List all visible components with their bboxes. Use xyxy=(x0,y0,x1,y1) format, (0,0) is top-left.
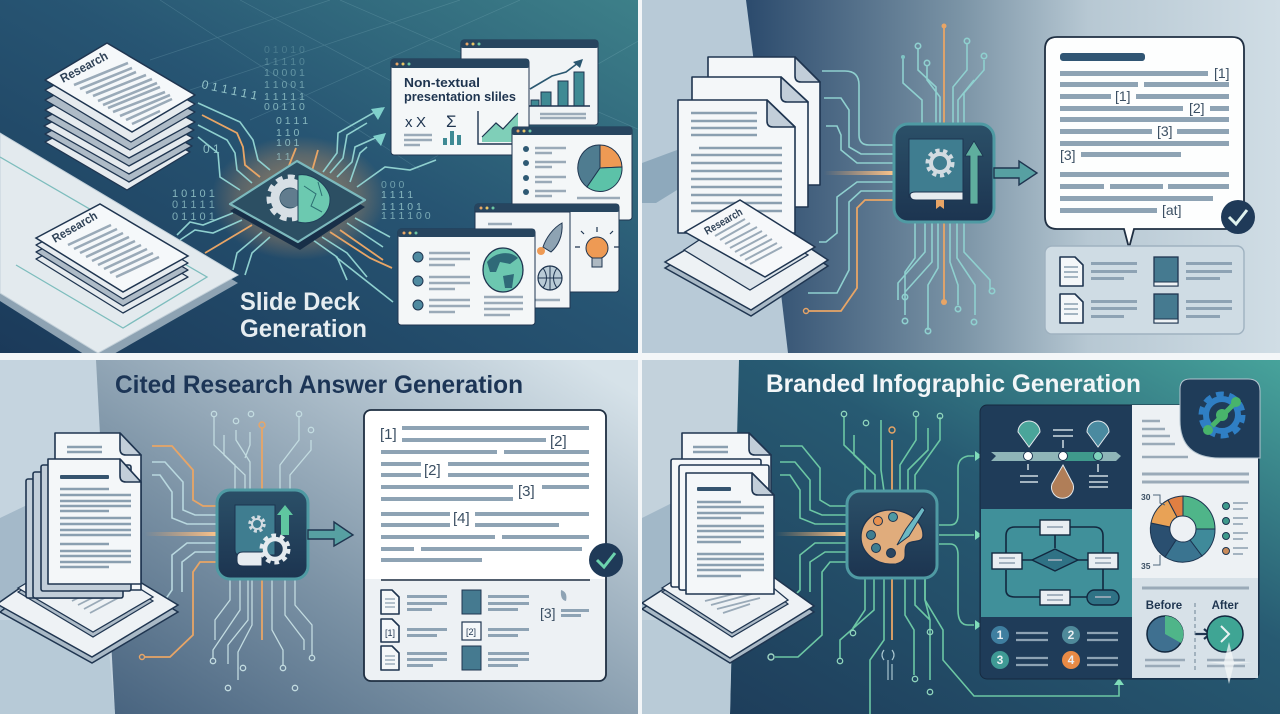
slide: non-textual presentation: Σ xyxy=(446,112,457,131)
answer card with references: [2] xyxy=(550,433,567,450)
arrow to answer xyxy=(994,161,1037,185)
document stack xyxy=(678,57,820,233)
check badge xyxy=(1221,200,1255,234)
timeline xyxy=(991,421,1121,498)
slide: non-textual presentation: x xyxy=(405,114,413,131)
numbered list: 4 xyxy=(1068,653,1075,667)
title: slide deck generation: Slide Deck xyxy=(240,288,360,316)
answer card with references: [1] xyxy=(385,628,395,638)
panel: cited answer with research document xyxy=(642,0,1280,353)
answer card: [3] xyxy=(1060,147,1076,163)
binary digit streams: 0 1 1 1 xyxy=(276,115,308,127)
paper stack lower xyxy=(36,204,188,313)
donut chart: 35 xyxy=(1141,561,1151,571)
binary digit streams: 1 1 xyxy=(276,151,291,163)
panel 1 background xyxy=(0,0,638,353)
panel 3 background xyxy=(96,360,638,714)
platform xyxy=(0,582,180,664)
binary digit streams: 1 1 1 1 0 xyxy=(264,56,305,68)
slide: non-textual presentation xyxy=(391,59,529,155)
paper stack lower: Research xyxy=(50,208,100,246)
before and after: After xyxy=(1212,600,1239,612)
answer card with references: [2] xyxy=(466,627,476,637)
platform under documents xyxy=(0,133,238,363)
circuit lines xyxy=(140,411,315,691)
answer card with references: [1] xyxy=(380,426,397,443)
slide: rocket and light bulb xyxy=(475,204,619,308)
binary digit streams: 1 1 1 1 0 0 xyxy=(381,210,431,222)
arrows to slides xyxy=(371,107,386,146)
answer card: [2] xyxy=(1189,100,1205,116)
flowchart xyxy=(992,520,1119,605)
before and after: Before xyxy=(1146,600,1182,612)
panel 4 background xyxy=(730,360,1280,714)
title: branded infographic: Branded Infographic Generation xyxy=(766,370,1141,398)
binary digit streams: 0 1 1 1 1 xyxy=(172,199,215,211)
binary digit streams: 1 1 1 0 1 xyxy=(381,201,422,213)
numbered list: 1 xyxy=(997,628,1004,642)
binary digit streams: 1 1 1 1 1 xyxy=(264,91,305,103)
teal flow section xyxy=(981,509,1132,617)
platform with research sheet: Research xyxy=(702,206,745,238)
document stack xyxy=(26,433,141,598)
icon: book gear xyxy=(217,490,308,579)
glow behind chip xyxy=(211,136,387,260)
binary digit streams: 1 1 0 0 1 xyxy=(264,79,305,91)
light left region xyxy=(642,360,739,714)
slide: non-textual presentation: presentation sliles xyxy=(404,89,516,104)
platform xyxy=(642,578,815,664)
panel 2 background xyxy=(642,0,1280,353)
binary digit streams: 0 1 xyxy=(203,142,220,156)
numbered list xyxy=(991,626,1118,669)
binary digit streams: 1 0 1 0 1 xyxy=(172,188,215,200)
answer card: [3] xyxy=(1157,123,1173,139)
slide: globe xyxy=(398,229,535,325)
slide: growth chart back xyxy=(461,40,598,125)
donut chart xyxy=(1141,492,1248,571)
slide: non-textual presentation: X xyxy=(416,114,426,131)
binary digit streams: 0 0 1 1 0 xyxy=(264,101,305,113)
binary digit streams: 1 1 0 xyxy=(276,127,300,139)
panel: cited research answer generation xyxy=(0,360,638,714)
answer card with references: [3] xyxy=(540,605,556,621)
numbered list: 3 xyxy=(997,653,1004,667)
slide: pie chart xyxy=(512,127,632,220)
light left region xyxy=(642,0,788,353)
logo badge xyxy=(1180,379,1260,458)
answer card: [at] xyxy=(1162,202,1181,218)
answer card with references: [3] xyxy=(518,483,535,500)
orange beam xyxy=(775,532,847,536)
answer card xyxy=(1045,37,1244,248)
chip with gear and brain icon xyxy=(230,161,365,250)
sources panel xyxy=(1045,246,1244,334)
title: slide deck generation xyxy=(240,292,366,337)
answer card with references xyxy=(364,410,606,681)
binary digit streams: 1 0 0 0 1 xyxy=(264,67,305,79)
binary digit streams: 1 1 1 1 xyxy=(381,189,413,201)
answer card with references: [4] xyxy=(453,510,470,527)
title: cited research: Cited Research Answer Generation xyxy=(115,371,523,399)
circuit lines xyxy=(768,411,1124,714)
binary digit streams: 0 1 1 0 1 xyxy=(172,211,215,223)
numbered list: 2 xyxy=(1068,628,1075,642)
right column xyxy=(1132,405,1258,578)
binary digit streams xyxy=(172,44,431,223)
document stack xyxy=(671,433,774,594)
infographic card xyxy=(980,379,1260,684)
donut chart: 30 xyxy=(1141,492,1151,502)
binary digit streams: 0 1 0 1 0 xyxy=(264,44,305,56)
binary digit streams: 0 0 0 xyxy=(381,179,405,191)
binary digit streams: 0 1 1 1 1 1 xyxy=(200,77,259,103)
title: slide deck generation: Generation xyxy=(240,315,367,343)
icon: paint palette xyxy=(847,491,937,578)
icon: book gear and arrow xyxy=(894,124,994,222)
arrow to answer xyxy=(308,522,353,546)
orange beam xyxy=(145,532,217,536)
panel: slide deck generation xyxy=(0,0,640,363)
binary digit streams: 1 0 1 xyxy=(276,137,300,149)
circuit lines into and out of chip xyxy=(177,103,436,302)
answer card: [1] xyxy=(1115,88,1131,104)
before and after xyxy=(1145,600,1252,684)
slide: non-textual presentation: Non-textual xyxy=(404,75,480,90)
check badge xyxy=(589,543,623,577)
light left region xyxy=(0,360,115,714)
platform with research sheet xyxy=(665,200,828,316)
answer card: [1] xyxy=(1214,65,1230,81)
paper stack upper xyxy=(44,43,195,190)
circuit lines around icon xyxy=(804,24,995,334)
panel: branded infographic generation xyxy=(642,360,1280,714)
orange beam xyxy=(824,171,894,175)
answer card with references: [2] xyxy=(424,462,441,479)
paper stack upper: Research xyxy=(58,49,110,86)
